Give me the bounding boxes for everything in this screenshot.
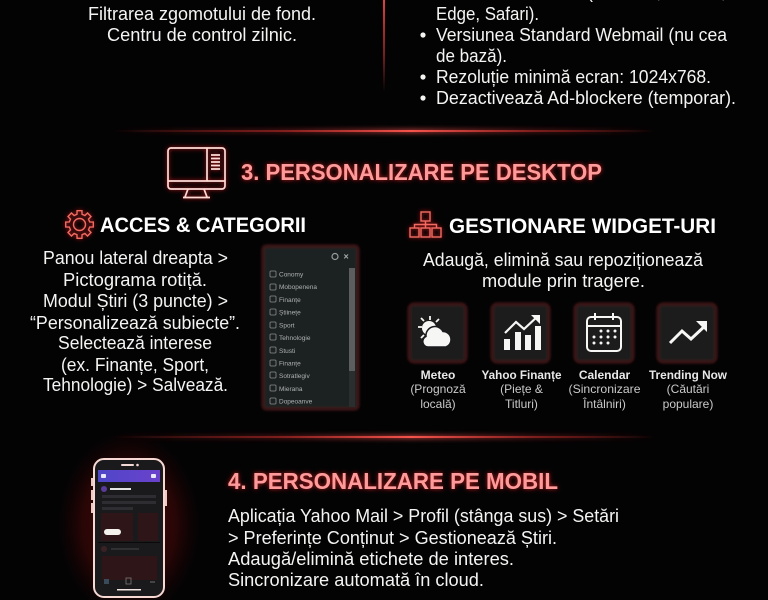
widget labels [410,368,728,411]
panel: category settings screenshot: Mobopenena [279,284,317,291]
text block: widget intro: Adaugă, elimină sau repoziționează [423,250,704,270]
panel: category settings screenshot: Stusti [279,348,295,355]
panel: category settings screenshot: Tehnologie [279,335,311,342]
icon: widget hierarchy [410,212,441,237]
text block: widget intro [423,250,704,291]
section 2 requirements list: Dezactivează Ad-blockere (temporar). [436,88,736,108]
vertical divider top [383,0,385,92]
panel: category settings screenshot: Știinețe [279,310,301,316]
panel: category settings screenshot: Sport [279,322,295,330]
widget: calendar [575,304,633,362]
text block: mobile instructions: Aplicația Yahoo Mail > Profil (stânga sus) > Setări [228,506,619,526]
text block: mobile instructions: Adaugă/elimină etichete de interes. [228,549,514,569]
panel: category settings screenshot: Dopeoanve [279,398,313,406]
text block: widget intro: module prin tragere. [482,271,645,291]
panel: category settings screenshot: Finanțe [279,360,301,368]
text block: acces instructions: Tehnologie) > Salvează. [43,375,228,395]
widget labels: populare) [663,397,713,411]
section 2 requirements list: Edge, Safari). [436,4,539,24]
panel: category settings screenshot: Finanțe [279,297,301,304]
section 2 requirements list: de bază). [436,46,507,66]
widget: trending now [658,304,716,362]
text block: mobile instructions [228,506,619,590]
text block: mobile instructions: Sincronizare automată în cloud. [228,570,484,590]
widget labels: (Piețe & [500,382,543,396]
widget labels: (Prognoză [410,382,466,396]
widget: meteo [409,304,466,362]
section 1 text fragment: Centru de control zilnic. [107,25,297,45]
panel: category settings screenshot: Sotratlegiv [279,373,310,380]
widget labels: Calendar [579,368,631,382]
section 1 text fragment [88,4,316,45]
text block: acces instructions: Modul Știri (3 puncte) > [43,291,228,311]
widget labels: locală) [420,397,456,411]
panel: category settings screenshot: Mierana [279,386,303,393]
text block: acces instructions: Pictograma rotiță. [63,270,207,290]
text block: acces instructions: “Personalizează subiecte”. [30,313,240,333]
widget labels: Meteo [421,368,455,382]
heading: acces and categories: ACCES & CATEGORII [100,214,306,237]
panel: category settings screenshot: Conomy [279,272,304,278]
panel: category settings screenshot [263,246,358,409]
text block: acces instructions [30,248,240,395]
text block: acces instructions: Selectează interese [58,333,212,353]
widget labels: Titluri) [505,397,538,411]
section 1 text fragment: Filtrarea zgomotului de fond. [88,4,316,24]
widget labels: Trending Now [649,368,728,382]
widget labels: (Sincronizare [568,382,641,396]
horizontal divider [112,435,656,439]
icon: desktop monitor [168,148,225,198]
icon: gear [66,211,93,238]
text block: acces instructions: (ex. Finanțe, Sport, [61,355,209,375]
section 2 requirements list: Rezoluție minimă ecran: 1024x768. [436,67,711,87]
horizontal divider [112,129,656,133]
heading: section 4: 4. PERSONALIZARE PE MOBIL [228,468,558,494]
widget: yahoo finante [492,304,549,362]
heading: widget management: GESTIONARE WIDGET-URI [449,215,716,238]
illustration: phone with yahoo mail [57,430,201,600]
text block: mobile instructions: > Preferințe Conținut > Gestionează Știri. [228,528,557,548]
section 2 requirements list [420,0,736,108]
panel: category settings screenshot: × [344,252,349,262]
heading: section 3: 3. PERSONALIZARE PE DESKTOP [241,159,602,185]
section 2 requirements list: Versiunea Standard Webmail (nu cea [436,25,728,45]
widget labels: Yahoo Finanțe [482,368,562,382]
text block: acces instructions: Panou lateral dreapta > [43,248,228,268]
widget labels: Întâlniri) [582,396,626,411]
widget labels: (Căutări [667,382,709,396]
